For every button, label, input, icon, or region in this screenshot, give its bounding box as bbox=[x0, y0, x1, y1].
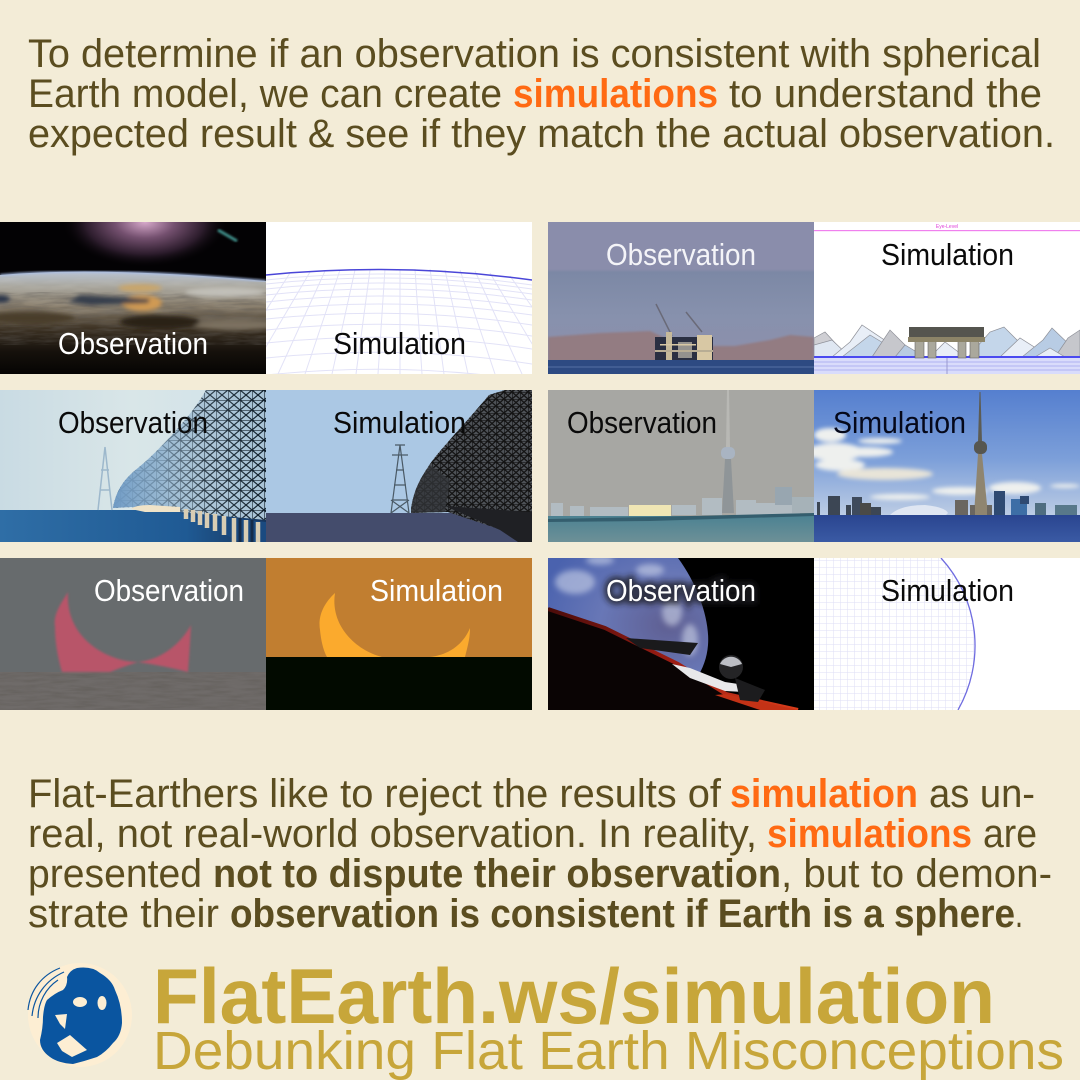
panel: roadster in space observation bbox=[548, 558, 814, 710]
explanation text block: presented bbox=[28, 852, 202, 896]
intro text block: To determine if an observation is consistent with spherical bbox=[28, 32, 1041, 76]
panel: sunset mirage observation bbox=[0, 558, 266, 710]
panel: oil rig simulation: Eye-Level bbox=[936, 224, 958, 230]
explanation text block: simulations bbox=[767, 812, 972, 856]
explanation text block: Flat-Earthers like to reject the results of bbox=[28, 772, 722, 816]
footer tagline: Debunking Flat Earth Misconceptions bbox=[153, 1021, 1064, 1080]
label: simulation 3: Simulation bbox=[333, 405, 466, 440]
panel: toronto skyline observation bbox=[548, 390, 814, 542]
icon: FlatEarth globe logo bbox=[28, 963, 132, 1067]
explanation text block: are bbox=[983, 812, 1037, 856]
explanation text block: as un- bbox=[929, 772, 1035, 816]
panel: bridge lattice observation bbox=[0, 390, 266, 542]
label: observation 1: Observation bbox=[58, 326, 208, 361]
intro text block: to understand the bbox=[729, 72, 1042, 116]
footer site title: FlatEarth.ws/simulation bbox=[153, 952, 995, 1040]
panel: horizon simulation grid bbox=[266, 222, 532, 374]
label: simulation 2: Simulation bbox=[881, 237, 1014, 272]
label: observation 3: Observation bbox=[58, 405, 208, 440]
label: observation 6 with dark glow: Observation bbox=[606, 573, 756, 608]
intro text block: simulations bbox=[513, 72, 718, 116]
panel: globe grid simulation bbox=[814, 558, 1080, 710]
intro text block: expected result & see if they match the actual observation. bbox=[28, 112, 1055, 156]
panel: horizon from space observation bbox=[0, 222, 266, 374]
explanation text block bbox=[28, 772, 1052, 936]
label: observation 2: Observation bbox=[606, 237, 756, 272]
intro text block: Earth model, we can create bbox=[28, 72, 502, 116]
label: simulation 5: Simulation bbox=[370, 573, 503, 608]
intro text block bbox=[28, 32, 1055, 156]
panel: sunset mirage simulation bbox=[266, 558, 532, 710]
label: simulation 6: Simulation bbox=[881, 573, 1014, 608]
explanation text block: , but to demon- bbox=[781, 852, 1052, 896]
explanation text block: not to dispute their observation bbox=[213, 852, 781, 896]
panel: oil rig observation bbox=[548, 222, 814, 374]
explanation text block: . bbox=[1015, 892, 1023, 936]
label: observation 6 with dark glow: Observation bbox=[606, 573, 756, 608]
explanation text block: strate their bbox=[28, 892, 219, 936]
panel: bridge lattice simulation bbox=[266, 390, 532, 542]
explanation text block: real, not real-world observation. In reality, bbox=[28, 812, 757, 856]
explanation text block: simulation bbox=[730, 772, 918, 816]
explanation text block: observation is consistent if Earth is a sphere bbox=[230, 892, 1015, 936]
label: simulation 1: Simulation bbox=[333, 326, 466, 361]
label: simulation 4: Simulation bbox=[833, 405, 966, 440]
panel: oil rig simulation bbox=[814, 222, 1080, 374]
label: observation 4: Observation bbox=[567, 405, 717, 440]
label: observation 5: Observation bbox=[94, 573, 244, 608]
panel: toronto skyline simulation bbox=[814, 390, 1080, 542]
